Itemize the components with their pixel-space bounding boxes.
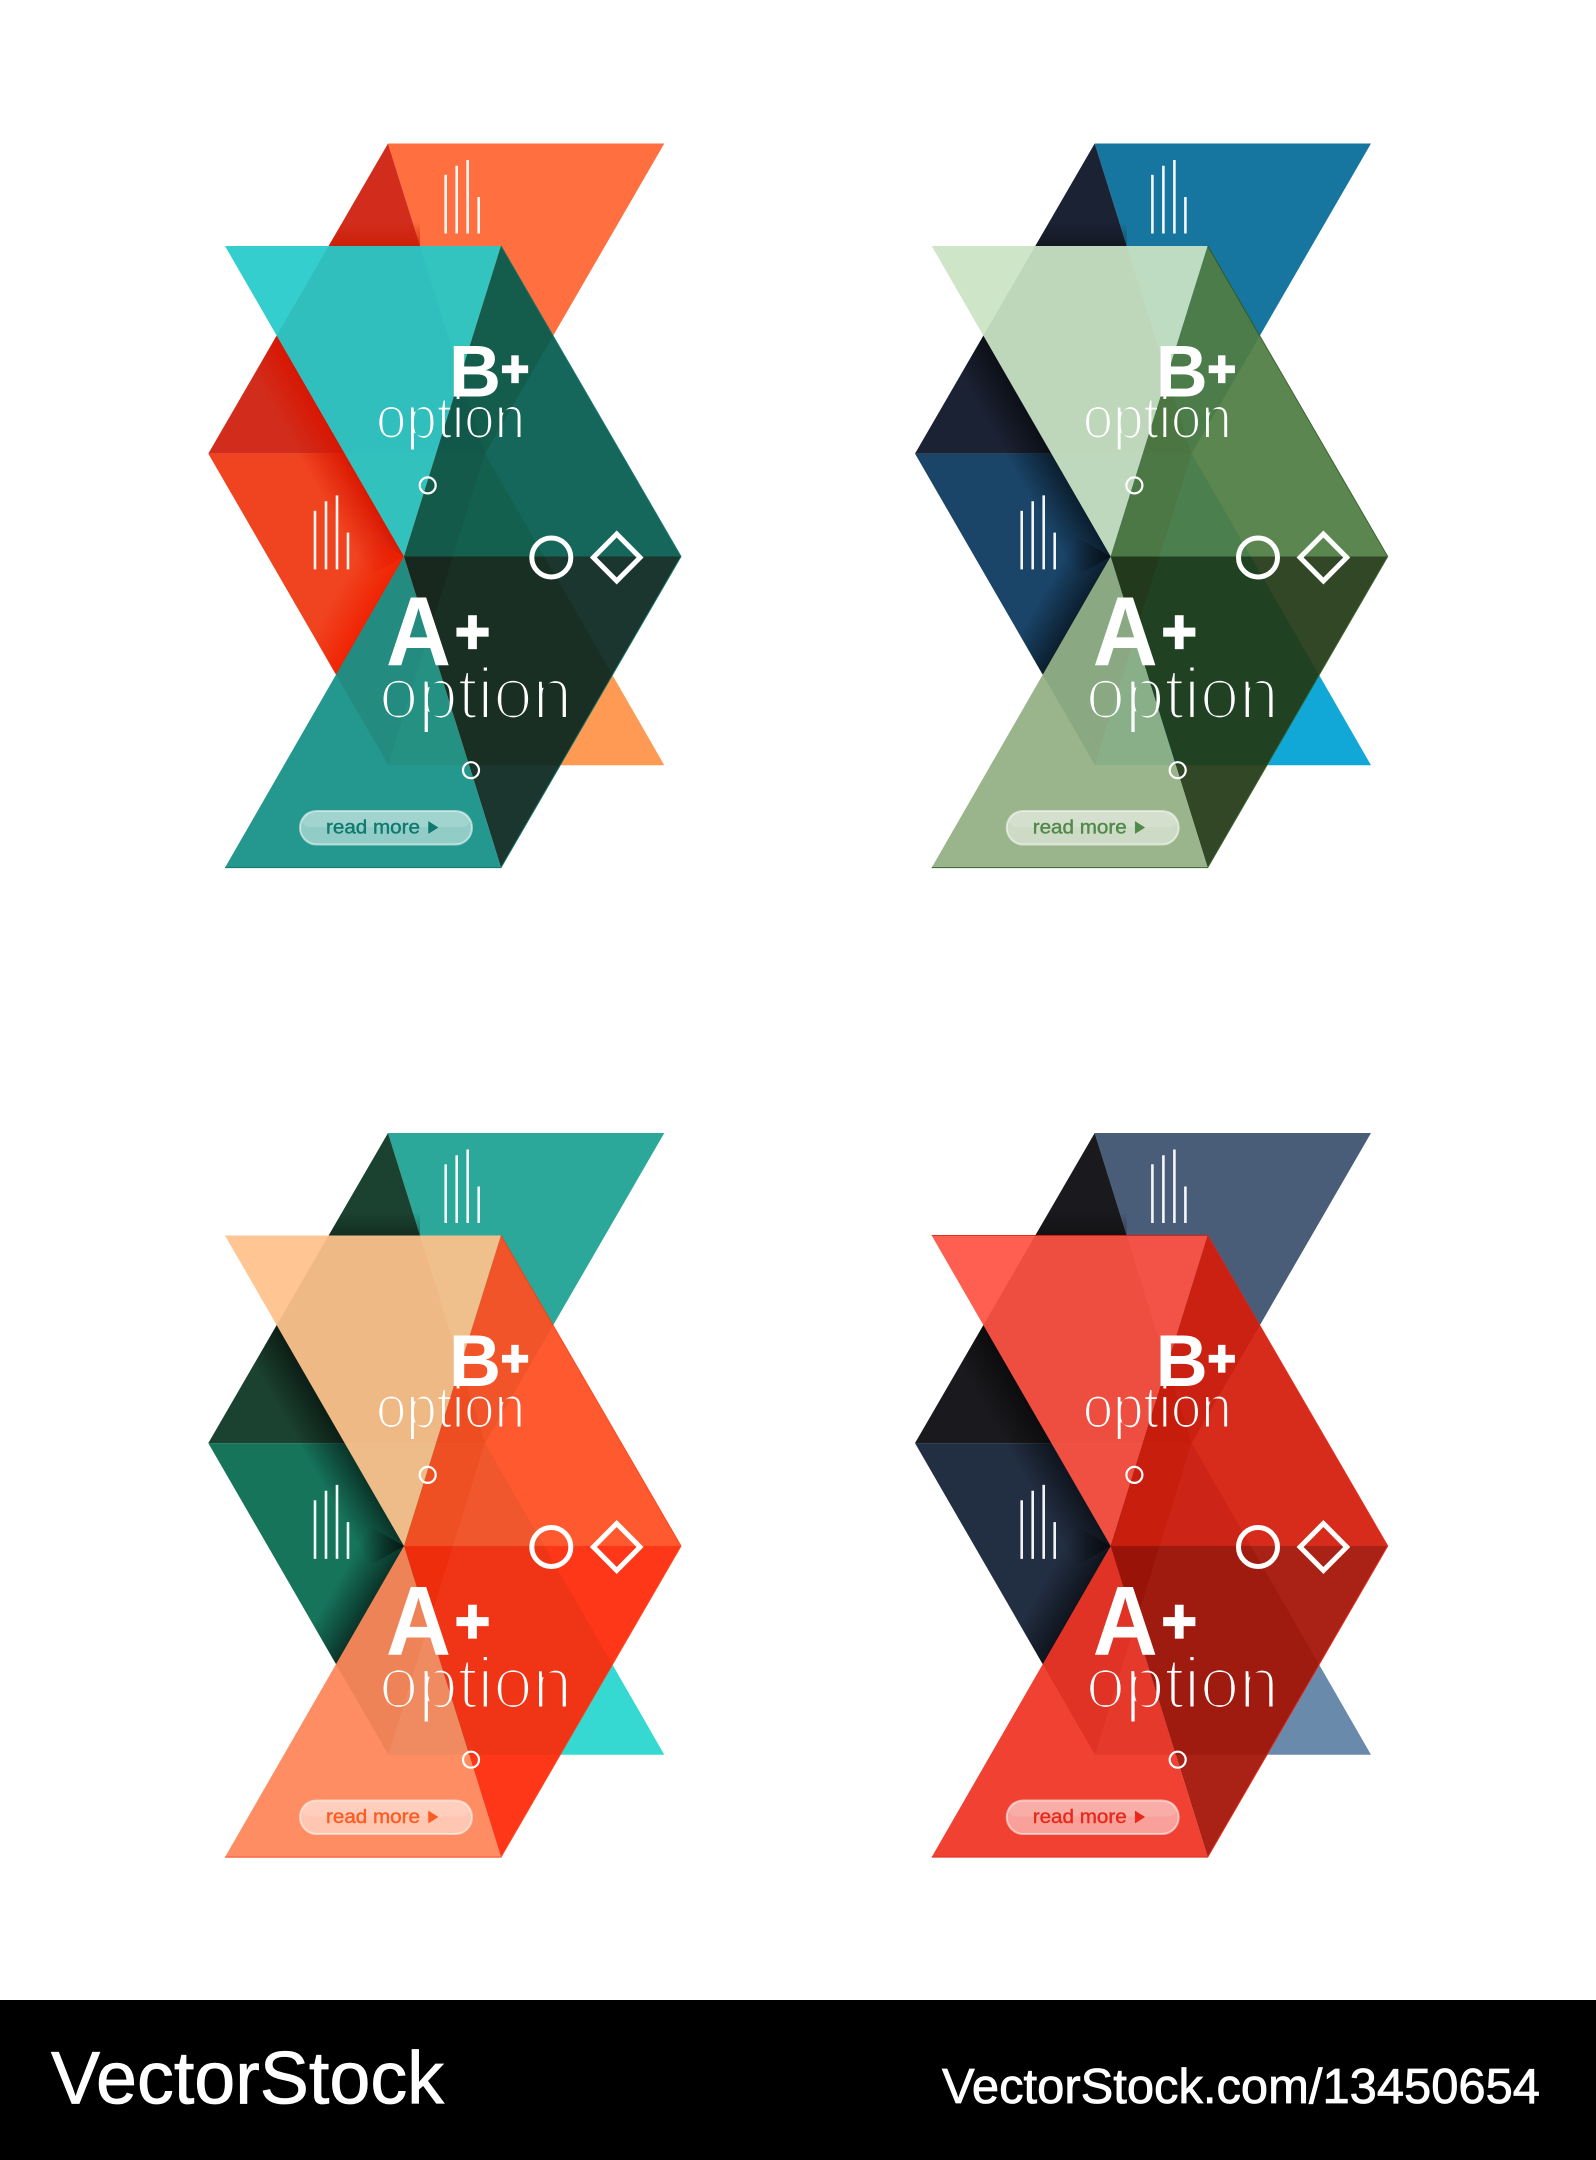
heading A+: [1093, 1566, 1197, 1676]
label option large: option: [379, 654, 572, 734]
heading A+: [1093, 576, 1197, 686]
heading B+: +: [501, 341, 529, 397]
diamond icon: [1300, 1524, 1347, 1570]
heading B+: +: [1208, 341, 1236, 397]
panel: blue and green option banner: [915, 144, 1388, 868]
panel: teal and orange option banner: [208, 1133, 681, 1857]
label option large: option: [379, 1644, 572, 1724]
heading B+: +: [1208, 1330, 1236, 1386]
button read more: read more: [1033, 1807, 1127, 1828]
heading A+: A: [1093, 1566, 1158, 1676]
button read more: [1007, 1800, 1179, 1834]
small ring A: [1170, 1752, 1186, 1768]
ring icon: [1238, 538, 1278, 577]
label option small: option: [1083, 385, 1232, 451]
diamond icon: [593, 1524, 640, 1570]
label option small: option: [1083, 1374, 1232, 1440]
front chevron: [932, 246, 1388, 868]
heading A+: [386, 1566, 490, 1676]
bar icon left: [1022, 495, 1055, 569]
label option large: option: [1086, 1644, 1279, 1724]
heading A+: A: [1093, 576, 1158, 686]
footer band: [0, 2000, 1596, 2160]
back chevron: [915, 1133, 1371, 1755]
bar icon left: [315, 495, 348, 569]
ring icon: [532, 1528, 571, 1566]
bar icon top: [446, 160, 479, 234]
heading A+: +: [1162, 1588, 1197, 1656]
ring icon: [1238, 1528, 1278, 1566]
ring icon: [532, 538, 571, 577]
diamond icon: [593, 534, 640, 581]
back chevron: [208, 1133, 664, 1755]
front chevron: [225, 246, 681, 868]
heading B+: [449, 1321, 529, 1402]
label option small: option: [376, 385, 525, 451]
heading A+: +: [455, 598, 490, 667]
button read more: read more: [326, 818, 420, 838]
heading A+: +: [1162, 598, 1197, 667]
panel: orange and teal option banner: [208, 144, 681, 868]
heading B+: B: [449, 332, 501, 412]
bar icon left: [315, 1485, 348, 1559]
bar icon left: [1022, 1485, 1055, 1559]
heading B+: [1156, 332, 1236, 412]
heading B+: +: [501, 1330, 529, 1386]
heading A+: [386, 576, 490, 686]
bar icon top: [1152, 1150, 1185, 1223]
bar icon top: [1152, 160, 1185, 234]
small ring B: [1126, 1467, 1142, 1483]
small ring B: [420, 477, 436, 493]
heading B+: [1156, 1321, 1236, 1402]
front chevron: [225, 1236, 681, 1857]
button read more: read more: [1033, 818, 1127, 838]
heading B+: B: [449, 1321, 501, 1402]
button read more: read more: [326, 1807, 420, 1828]
small ring B: [1126, 477, 1142, 493]
heading A+: +: [455, 1588, 490, 1656]
label option small: option: [376, 1374, 525, 1440]
label option large: option: [1086, 654, 1279, 734]
heading B+: B: [1156, 1321, 1208, 1402]
panel: navy and red option banner: [915, 1133, 1388, 1857]
small ring B: [420, 1467, 436, 1483]
heading A+: A: [386, 576, 451, 686]
button read more: [300, 811, 472, 844]
back chevron: [915, 144, 1371, 765]
heading B+: [449, 332, 529, 412]
small ring A: [1170, 762, 1186, 778]
heading B+: B: [1156, 332, 1208, 412]
heading A+: A: [386, 1566, 451, 1676]
footer image id: VectorStock.com/13450654: [942, 2060, 1540, 2114]
front chevron: [932, 1236, 1388, 1857]
diamond icon: [1300, 534, 1347, 581]
button read more: [1007, 811, 1179, 844]
small ring A: [463, 1752, 479, 1768]
small ring A: [463, 762, 479, 778]
button read more: [300, 1800, 472, 1834]
bar icon top: [446, 1150, 479, 1223]
back chevron: [208, 144, 664, 765]
footer logo: VectorStock: [51, 2036, 445, 2120]
